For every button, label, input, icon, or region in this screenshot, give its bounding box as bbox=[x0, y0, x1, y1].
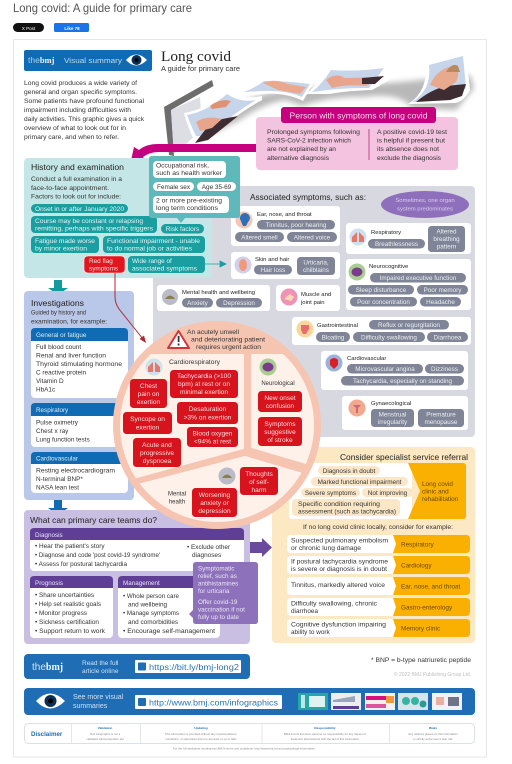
card: mental health and wellbeing bbox=[157, 285, 270, 311]
section: mental health: Worsening bbox=[199, 492, 231, 499]
long covid clinic box: Long covid bbox=[422, 481, 453, 488]
section: cardiorespiratory: exertion bbox=[136, 424, 160, 432]
callout: one organ system bbox=[381, 191, 469, 218]
introduction text: general and organ specific symptoms. bbox=[24, 89, 137, 96]
card: gastrointestinal bbox=[292, 317, 471, 345]
card: neurocognitive: Neurocognitive bbox=[369, 264, 409, 270]
panel: history and examination: Risk factors bbox=[166, 226, 199, 233]
panel: risk factors: long term conditions bbox=[156, 205, 218, 212]
red flag circle: urgent action bbox=[113, 321, 321, 529]
disclaimer bar bbox=[24, 724, 474, 744]
page title: Long covid: A guide for primary care bbox=[13, 2, 192, 15]
heading: person with symptoms bbox=[281, 107, 436, 123]
panel: history and examination bbox=[24, 158, 212, 278]
banner: more visual summaries: See more visual bbox=[73, 694, 124, 701]
arrow: investigations to primary care bbox=[48, 500, 68, 515]
callout: symptomatic relief: relief, such as bbox=[198, 573, 237, 580]
page three bbox=[306, 63, 400, 94]
banner: more visual summaries: summaries bbox=[73, 703, 108, 710]
panel: risk factors: such as health worker bbox=[156, 170, 223, 177]
disclaimer bar: Risks bbox=[429, 726, 437, 730]
box: management: Management bbox=[123, 580, 160, 587]
ribbon shadow bbox=[195, 75, 474, 142]
card: ear nose throat: Tinnitus, poor hearing bbox=[266, 222, 327, 229]
arrow: primary care to referral bbox=[250, 538, 272, 557]
book cover bbox=[164, 80, 214, 156]
card: respiratory: Respiratory bbox=[371, 230, 401, 236]
long covid clinic box: Marked functional impairment bbox=[318, 479, 402, 486]
box: general or fatigue: Renal and liver function bbox=[36, 352, 106, 360]
page one bbox=[184, 91, 262, 140]
urgent action text: and deteriorating patient bbox=[191, 336, 265, 344]
card: gynaecological: Gynaecological bbox=[371, 401, 411, 407]
box: diagnosis: • Hear the patient's story bbox=[35, 543, 105, 550]
box: management bbox=[118, 576, 220, 638]
urgent action text: requires urgent action bbox=[196, 344, 262, 351]
box: diagnosis bbox=[30, 528, 244, 571]
introduction text: Long covid produces a wide variety of bbox=[24, 80, 137, 87]
right definition text: exclude the diagnosis bbox=[377, 155, 441, 162]
section: cardiorespiratory: >3% on exertion bbox=[184, 414, 232, 422]
card: gynaecological: Menstrual bbox=[379, 412, 406, 418]
disclaimer bar: Updating bbox=[194, 726, 208, 730]
row: cardiology: is severe or diagnosis is in doubt bbox=[291, 566, 387, 573]
arrow: history to investigations bbox=[48, 280, 68, 295]
social buttons bbox=[13, 23, 89, 32]
section: neurological: of stroke bbox=[267, 437, 293, 444]
social buttons: X Post bbox=[22, 26, 36, 31]
row: ear nose throat: Tinnitus, markedly altered voice bbox=[291, 582, 385, 589]
row: memory clinic bbox=[287, 619, 470, 637]
disclaimer bar: BMJ and its licensors assume no responsibility for any aspect of bbox=[284, 732, 366, 736]
panel: history and examination: face-to-face appointment. bbox=[31, 185, 109, 192]
card: gynaecological bbox=[342, 396, 468, 430]
box: prognosis: • Monitor progress bbox=[35, 610, 87, 617]
box: prognosis: • Support return to work bbox=[35, 628, 106, 635]
box: general or fatigue: C reactive protein bbox=[36, 370, 87, 376]
section: neurological: confusion bbox=[266, 403, 294, 410]
section: cardiorespiratory: Tachycardia (>100 bbox=[177, 373, 231, 380]
magenta arrow from person box bbox=[130, 144, 260, 165]
warning triangle icon bbox=[168, 331, 189, 348]
section: neurological: Symptoms bbox=[264, 421, 296, 428]
disclaimer bar: Validation bbox=[98, 726, 112, 730]
section: mental health bbox=[168, 467, 278, 517]
social buttons: Like 78 bbox=[64, 26, 80, 31]
page two bbox=[238, 79, 314, 101]
card: respiratory bbox=[346, 223, 471, 254]
panel: investigations: Investigations bbox=[31, 298, 84, 308]
panel: history and examination: associated symptoms bbox=[132, 266, 197, 272]
section: cardiorespiratory: Desaturation bbox=[189, 406, 227, 413]
panel: history and examination: Conduct a full examination in a bbox=[31, 176, 122, 183]
section: cardiorespiratory: <94% at rest bbox=[194, 438, 231, 446]
card: neurocognitive: Poor memory bbox=[424, 287, 462, 294]
panel: history and examination: History and examination bbox=[31, 162, 124, 172]
thumbnails of other infographics bbox=[298, 693, 462, 710]
card: ear nose throat: Altered smell bbox=[241, 234, 278, 241]
right definition text: A positive covid-19 test bbox=[377, 129, 447, 136]
right definition text: is helpful if present but bbox=[377, 138, 445, 144]
banner: read the full article: Read the full bbox=[82, 660, 119, 667]
panel: history and examination: to do normal job or activities bbox=[107, 246, 192, 252]
row: gastroenterology: diarrhoea bbox=[291, 608, 318, 615]
box: cardiovascular: NASA lean test bbox=[36, 484, 79, 492]
section: mental health: depression bbox=[198, 508, 231, 515]
panel: associated symptoms bbox=[153, 186, 475, 437]
left definition text: are not explained by an bbox=[267, 146, 337, 153]
box: prognosis: Prognosis bbox=[35, 580, 63, 587]
callout: one organ system: Sometimes, one organ bbox=[395, 198, 455, 204]
card: neurocognitive: Sleep disturbance bbox=[356, 287, 407, 294]
panel: history and examination: Functional impairment - unable bbox=[107, 238, 200, 245]
footnote: BNP: * BNP = b-type natriuretic peptide bbox=[371, 658, 472, 664]
card: cardiovascular: Tachycardia, especially on standing bbox=[353, 378, 453, 385]
callout: one organ system: system predominates bbox=[397, 206, 453, 212]
section: cardiorespiratory: Acute and bbox=[142, 442, 172, 449]
section: cardiorespiratory: bpm) at rest or on bbox=[178, 381, 230, 388]
row: ear nose throat: Ear, nose, and throat bbox=[401, 584, 461, 590]
box: general or fatigue: Thyroid stimulating hormone bbox=[36, 361, 122, 368]
left definition text: Prolonged symptoms following bbox=[267, 129, 361, 136]
section: mental health: Mental bbox=[168, 492, 186, 498]
section: cardiorespiratory: minimal exertion bbox=[180, 389, 228, 396]
box: prognosis: • Share uncertainties bbox=[35, 592, 94, 599]
box: management: and wellbeing bbox=[128, 602, 168, 608]
box: general or fatigue: Vitamin D bbox=[36, 378, 64, 385]
box: prognosis: • Help set realistic goals bbox=[35, 601, 101, 608]
section: mental health: health bbox=[169, 500, 185, 506]
row: respiratory: Respiratory bbox=[401, 542, 434, 548]
box: general or fatigue: General or fatigue bbox=[36, 332, 87, 339]
introduction text: Some patients have profound functional bbox=[24, 98, 144, 105]
card: mental health and wellbeing: Depression bbox=[223, 300, 255, 307]
banner: read the full article: thebmj bbox=[32, 662, 63, 673]
section: cardiorespiratory: progressive bbox=[140, 450, 174, 457]
heading: person with symptoms: Person with symptoms of long covid bbox=[290, 112, 428, 120]
long covid clinic box: Not improving bbox=[368, 490, 408, 497]
panel: risk factors: Age 35-69 bbox=[202, 184, 232, 191]
panel: risk factors bbox=[149, 156, 240, 223]
row: respiratory bbox=[287, 535, 470, 553]
card: gastrointestinal: Reflux or regurgitation bbox=[378, 322, 440, 329]
row: gastroenterology: Gastro-enterology bbox=[401, 604, 453, 612]
card: neurocognitive: Headache bbox=[426, 299, 455, 306]
box: general or fatigue: HbA1c bbox=[36, 386, 56, 394]
urgent action text bbox=[187, 329, 265, 351]
box: cardiovascular: N-terminal BNP* bbox=[36, 476, 83, 483]
card: muscle and joint pain bbox=[276, 285, 340, 311]
disclaimer bar: Any reliance placed on this information bbox=[408, 732, 458, 736]
callout: symptomatic relief: Symptomatic bbox=[198, 566, 234, 572]
section: cardiorespiratory bbox=[123, 358, 238, 467]
card: gastrointestinal: Difficulty swallowing bbox=[361, 334, 417, 341]
row: gastroenterology: Difficulty swallowing, chronic bbox=[291, 600, 378, 608]
disclaimer bar: Responsibility bbox=[314, 726, 336, 730]
panel: primary care teams: What can primary care teams do? bbox=[30, 515, 157, 525]
banner: read the full article: https://bit.ly/bmj-long2 bbox=[149, 663, 240, 672]
disclaimer bar: This infographic is not a bbox=[90, 732, 121, 736]
card: muscle and joint pain: joint pain bbox=[300, 300, 325, 306]
section: cardiorespiratory: Blood oxygen bbox=[193, 430, 233, 438]
card: gastrointestinal: Diarrhoea bbox=[434, 334, 462, 341]
long covid clinic box: clinic and bbox=[422, 488, 449, 496]
disclaimer bar: conditions, or warranties that it is accurate or up to date bbox=[165, 737, 237, 741]
card: respiratory: breathing bbox=[433, 236, 460, 243]
card: skin and hair bbox=[231, 252, 340, 279]
row: memory clinic: Memory clinic bbox=[401, 626, 441, 632]
disclaimer bar: Disclaimer bbox=[31, 731, 63, 738]
main heading bbox=[161, 49, 240, 73]
arrow: to associated symptoms bbox=[205, 261, 226, 267]
disclaimer bar: validated clinical decision aid bbox=[86, 737, 124, 741]
section: neurological: Neurological bbox=[261, 381, 295, 387]
long covid clinic box: Diagnosis in doubt bbox=[323, 468, 376, 475]
section: cardiorespiratory: dyspnoea bbox=[143, 458, 172, 465]
card: gynaecological: menopause bbox=[425, 419, 458, 426]
left definition text bbox=[267, 129, 361, 162]
panel: risk factors: Female sex bbox=[157, 184, 191, 191]
disclaimer bar: treatment administered with the aid of this information bbox=[291, 737, 360, 741]
card: neurocognitive: Impaired executive function bbox=[380, 275, 457, 282]
long covid clinic box: rehabilitation bbox=[422, 496, 459, 503]
illustration: book pages with hands bbox=[164, 52, 474, 156]
box: prognosis: • Sickness certification bbox=[35, 619, 99, 626]
card: mental health and wellbeing: Anxiety bbox=[187, 300, 209, 307]
box: diagnosis: • Assess for postural tachycardia bbox=[35, 561, 127, 568]
card: muscle and joint pain: Muscle and bbox=[301, 292, 331, 298]
card: ear nose throat: Altered voice bbox=[294, 234, 331, 241]
banner: the bmj visual summary: Visual summary bbox=[64, 56, 122, 65]
box: cardiovascular: Resting electrocardiogram bbox=[36, 468, 115, 474]
banner: more visual summaries: http://www.bmj.com/infographics bbox=[149, 698, 278, 708]
row: respiratory: or chronic lung damage bbox=[291, 545, 361, 552]
box: respiratory: Pulse oximetry bbox=[36, 420, 79, 426]
box: management: • Encourage self-management bbox=[123, 628, 215, 635]
section: mental health: anxiety or bbox=[200, 500, 230, 507]
main heading: A guide for primary care bbox=[161, 64, 240, 73]
card: neurocognitive bbox=[346, 259, 471, 310]
section: mental health: harm bbox=[251, 487, 267, 494]
box: general or fatigue: Full blood count bbox=[36, 344, 81, 351]
copyright: © 2022 BMJ Publishing Group Ltd. bbox=[394, 671, 471, 678]
banner: read the full article bbox=[24, 654, 250, 679]
card: gastrointestinal: Bloating bbox=[322, 334, 345, 341]
row: memory clinic: Cognitive dysfunction impairing bbox=[291, 622, 386, 628]
card: gynaecological: Premature bbox=[426, 412, 456, 418]
box: diagnosis: diagnoses bbox=[192, 552, 221, 559]
card: cardiovascular: Dizziness bbox=[431, 366, 458, 373]
card: gynaecological: irregularity bbox=[378, 419, 408, 426]
introduction text: impairment including difficulties with bbox=[24, 107, 131, 114]
card: skin and hair: Urticaria, bbox=[303, 260, 329, 266]
card: ear nose throat bbox=[231, 206, 340, 246]
row: ear nose throat bbox=[287, 577, 470, 595]
left definition text: SARS-CoV-2 infection which bbox=[267, 138, 352, 144]
panel: specialist referral bbox=[272, 447, 475, 643]
callout: symptomatic relief: vaccination if not bbox=[198, 606, 245, 614]
disclaimer footer link: For the full disclaimer wording see BMJ's terms and conditions: http://www.bmj.com/company/legal-information/ bbox=[173, 746, 315, 750]
disclaimer bar: is strictly at the user's own risk bbox=[414, 737, 453, 741]
box: respiratory: Lung function tests bbox=[36, 436, 90, 444]
section: neurological bbox=[258, 358, 302, 446]
section: cardiorespiratory: Chest bbox=[140, 383, 157, 390]
introduction text bbox=[24, 80, 145, 141]
panel: definition of long covid bbox=[256, 117, 458, 170]
callout: symptomatic relief: antihistamines bbox=[198, 580, 238, 588]
panel: history and examination: by minor exertion bbox=[35, 246, 87, 252]
box: management: • Manage symptoms bbox=[123, 610, 179, 617]
right definition text: its absence does not bbox=[377, 146, 439, 153]
section: cardiorespiratory: Syncope on bbox=[130, 416, 165, 423]
panel: investigations: Guided by history and bbox=[31, 310, 86, 316]
row: gastroenterology bbox=[287, 598, 470, 616]
section: mental health: Thoughts bbox=[245, 471, 273, 478]
card: skin and hair: Hair loss bbox=[261, 267, 285, 274]
panel: risk factors: Occupational risk, bbox=[156, 162, 209, 170]
introduction text: daily activities. This graphic gives a quick bbox=[24, 116, 145, 123]
section: cardiorespiratory: exertion bbox=[137, 399, 161, 406]
panel: history and examination: remitting, perhaps with specific triggers bbox=[35, 226, 153, 232]
box: diagnosis: Diagnosis bbox=[35, 532, 63, 539]
box: management: and comorbidities bbox=[128, 619, 178, 626]
row: cardiology bbox=[287, 556, 470, 574]
card: skin and hair: Skin and hair bbox=[255, 257, 289, 263]
box: respiratory: Chest x ray bbox=[36, 428, 69, 435]
banner: the bmj visual summary bbox=[24, 50, 152, 71]
urgent action text: An acutely unwell bbox=[187, 329, 239, 336]
panel: history and examination: Factors to look out for include: bbox=[31, 194, 121, 200]
main heading: Long covid bbox=[161, 49, 232, 65]
box: management: • Whole person care bbox=[123, 593, 179, 600]
section: neurological: New onset bbox=[264, 395, 296, 402]
introduction text: overview of what to look out for in bbox=[24, 125, 126, 132]
box: respiratory: Respiratory bbox=[36, 407, 69, 414]
panel: specialist referral: If no long covid clinic locally, consider for example: bbox=[303, 524, 453, 531]
row: respiratory: Suspected pulmonary embolism bbox=[291, 538, 388, 544]
callout: symptomatic relief: for urticaria bbox=[198, 588, 230, 595]
card: gastrointestinal: Gastrointestinal bbox=[317, 323, 358, 329]
box: diagnosis: • Exclude other bbox=[187, 544, 231, 551]
panel: associated symptoms: Associated symptoms, such as: bbox=[250, 192, 366, 202]
banner: read the full article: article online bbox=[82, 668, 119, 675]
callout: symptomatic relief: fully up to date bbox=[198, 614, 239, 621]
page four bbox=[408, 52, 470, 104]
box: prognosis bbox=[30, 576, 113, 638]
right definition text bbox=[377, 129, 447, 162]
long covid clinic box: Specific condition requiring bbox=[298, 501, 380, 508]
left definition text: alternative diagnosis bbox=[267, 155, 329, 162]
panel: investigations: examination, for example: bbox=[31, 318, 107, 326]
card: skin and hair: chilblains bbox=[303, 267, 329, 274]
section: cardiorespiratory: Cardiorespiratory bbox=[169, 360, 220, 366]
panel: history and examination: symptoms bbox=[89, 266, 118, 272]
card: neurocognitive: Poor concentration bbox=[357, 299, 410, 306]
panel: risk factors: 2 or more pre-existing bbox=[156, 198, 222, 204]
panel: history and examination: Course may be constant or relapsing bbox=[35, 218, 143, 225]
box: cardiovascular: Cardiovascular bbox=[36, 456, 78, 462]
banner: the bmj visual summary: thebmj bbox=[28, 55, 55, 65]
arrow: red flag to urgent action bbox=[115, 273, 146, 343]
box: respiratory bbox=[31, 403, 128, 447]
panel: history and examination: Wide range of bbox=[132, 258, 172, 265]
long covid clinic box: assessment (such as tachycardia) bbox=[298, 508, 396, 516]
panel: primary care teams bbox=[24, 510, 258, 644]
section: mental health: of self- bbox=[249, 479, 269, 486]
callout: symptomatic relief: Offer covid-19 bbox=[198, 599, 238, 606]
row: cardiology: Cardiology bbox=[401, 562, 432, 570]
box: cardiovascular bbox=[31, 452, 128, 493]
panel: history and examination: Fatigue made worse bbox=[35, 238, 95, 245]
card: ear nose throat: Ear, nose, and throat bbox=[257, 212, 312, 218]
box: diagnosis: • Diagnose and code 'post covid-19 syndrome' bbox=[35, 552, 160, 559]
section: cardiorespiratory: pain on bbox=[138, 391, 160, 398]
row: cardiology: If postural tachycardia syndrome bbox=[291, 558, 388, 566]
long covid clinic box bbox=[289, 463, 466, 519]
card: respiratory: pattern bbox=[437, 244, 457, 250]
panel: history and examination: Onset in or after January 2020 bbox=[35, 206, 124, 213]
card: cardiovascular: Cardiovascular bbox=[347, 356, 386, 362]
panel: specialist referral: Consider specialist service referral bbox=[340, 452, 468, 462]
disclaimer bar: This information is provided without any representations, bbox=[165, 732, 237, 736]
callout: symptomatic relief bbox=[189, 562, 258, 624]
panel: investigations bbox=[24, 291, 134, 500]
card: respiratory: Altered bbox=[437, 228, 457, 236]
card: mental health and wellbeing: Mental health and wellbeing bbox=[182, 290, 255, 296]
banner: more visual summaries bbox=[24, 688, 475, 715]
card: respiratory: Breathlessness bbox=[375, 241, 418, 248]
section: neurological: suggestive bbox=[264, 429, 296, 436]
row: memory clinic: ability to work bbox=[291, 629, 331, 636]
box: general or fatigue bbox=[31, 328, 128, 398]
card: cardiovascular bbox=[321, 351, 468, 390]
long covid clinic box: Severe symptoms bbox=[305, 490, 356, 497]
panel: history and examination: Red flag bbox=[89, 258, 113, 265]
card: cardiovascular: Microvascular angina bbox=[355, 366, 415, 373]
introduction text: primary care, and when to refer. bbox=[24, 134, 119, 141]
